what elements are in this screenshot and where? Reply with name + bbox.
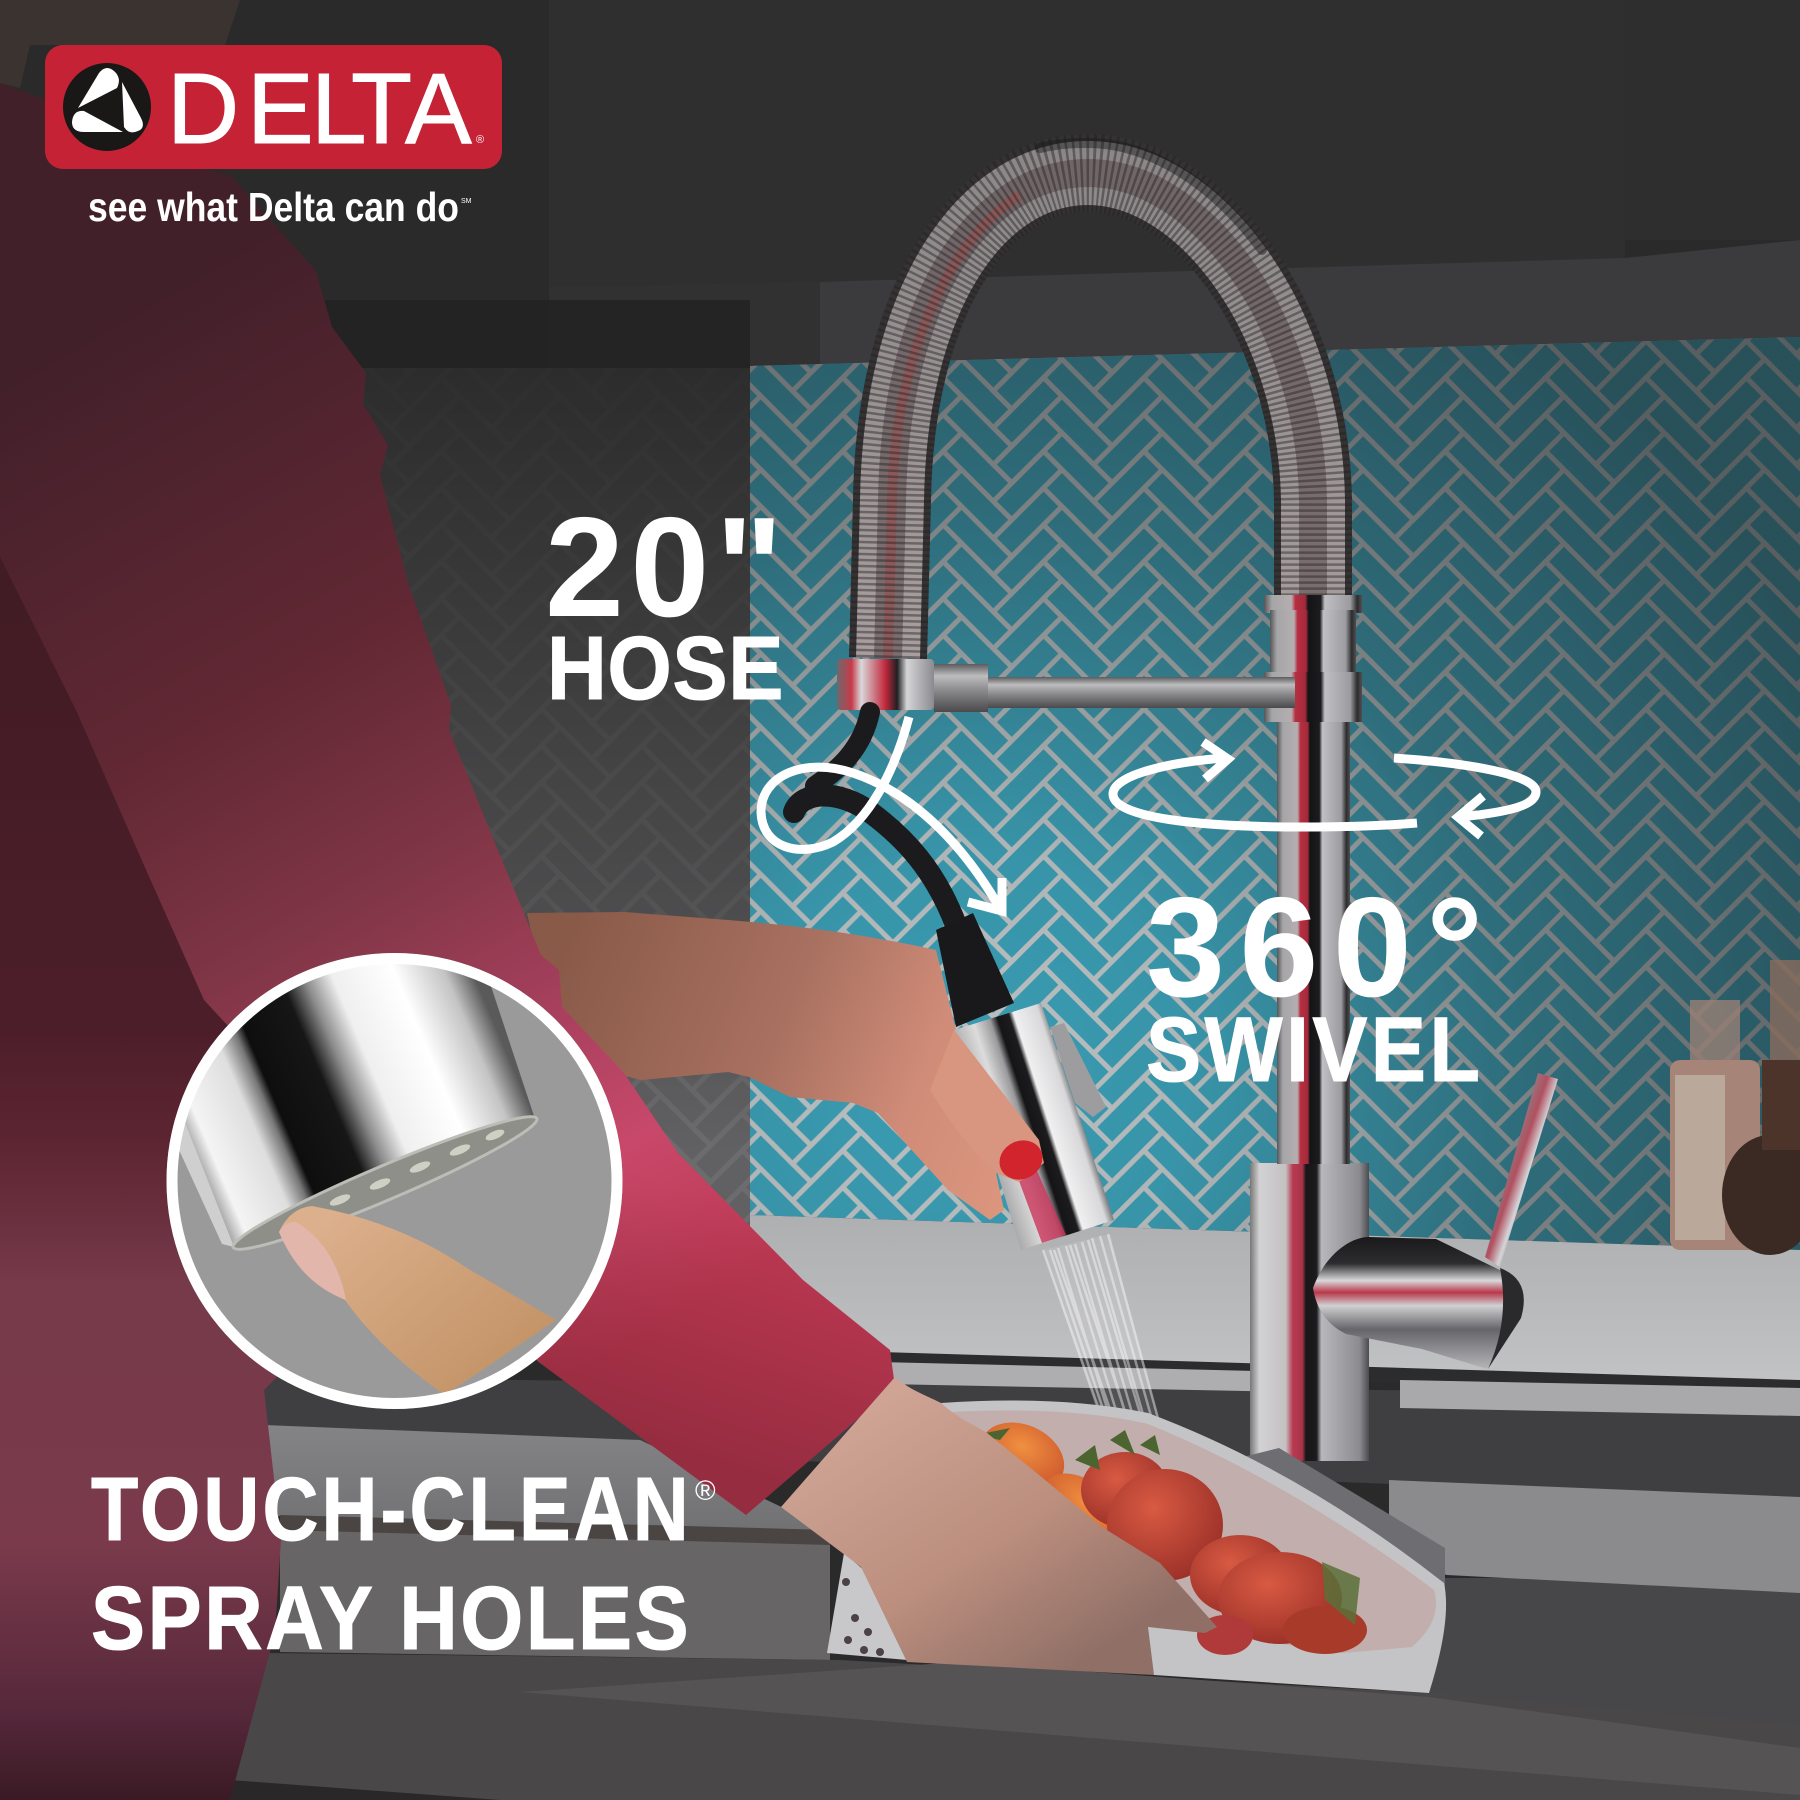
water spray [1043, 1234, 1172, 1505]
heading: touch-clean spray holes: ® [695, 1475, 716, 1506]
faucet [837, 143, 1558, 1590]
sweater body [0, 83, 540, 1800]
heading: touch-clean spray holes: SPRAY HOLES [91, 1568, 689, 1669]
deck plate [1235, 1448, 1445, 1590]
hair and shoulder top-left [0, 0, 240, 88]
sprayer paddle button [1050, 1023, 1106, 1117]
lever handle [1485, 1073, 1558, 1267]
heading: touch-clean spray holes [91, 1459, 716, 1669]
column [1277, 722, 1350, 1167]
black pull-down hose [794, 712, 956, 925]
heading: 20 inch hose: HOSE [547, 619, 783, 719]
flexible spring hose [888, 143, 1313, 658]
inset circle: touch-clean spray holes [160, 945, 622, 1409]
colander bowl [827, 1401, 1446, 1693]
teal herringbone backsplash [750, 337, 1800, 1250]
index finger over sprayer [930, 1030, 1044, 1182]
hand holding the bowl [781, 1377, 1217, 1675]
arrow: hose pull-out loop [761, 717, 1002, 911]
registered mark: ® [476, 134, 484, 146]
bottles on the right [1670, 960, 1800, 1255]
heading: 360 swivel: SWIVEL [1146, 998, 1480, 1101]
handle body [1313, 1237, 1523, 1369]
counter ledge and cabinet front [264, 1215, 1800, 1728]
heading: 360 swivel: 360° [1146, 868, 1483, 1027]
chrome spray head and finger [160, 945, 556, 1395]
fingernail [279, 1222, 346, 1300]
column upper collar [1264, 595, 1362, 722]
inset white ring [172, 958, 617, 1404]
finger [279, 1206, 556, 1395]
red fingernail [993, 1133, 1049, 1187]
heading: 20 inch hose: 20" [545, 488, 783, 647]
tagline: see what Delta can do [88, 184, 459, 230]
bowl outer shell [941, 1401, 1446, 1693]
heading: 20 inch hose [545, 488, 783, 719]
tagline: SM [461, 198, 472, 205]
arrow: 360 swivel rotation [1113, 742, 1536, 836]
sleeve and upper arm [0, 83, 895, 1515]
hose collar [837, 659, 934, 710]
logo: Delta red badge [45, 45, 502, 169]
sink and countertop [230, 1425, 1800, 1800]
forearm and hand holding sprayer [527, 912, 1044, 1220]
horizontal swing arm [934, 664, 1295, 712]
heading: touch-clean spray holes: TOUCH-CLEAN [91, 1459, 689, 1559]
inset background [166, 953, 622, 1409]
strawberries [969, 1409, 1367, 1655]
colander holes [827, 1553, 907, 1660]
handle end cap [1488, 1268, 1524, 1369]
black sprayer collar [936, 913, 1014, 1027]
sprayer head [954, 1003, 1114, 1250]
logo wordmark: DELTA [167, 53, 472, 165]
bowl interior [950, 1410, 1436, 1653]
heading: 360 swivel [1146, 868, 1483, 1101]
logo triangle emblem [63, 63, 151, 151]
base body [1250, 1163, 1369, 1461]
